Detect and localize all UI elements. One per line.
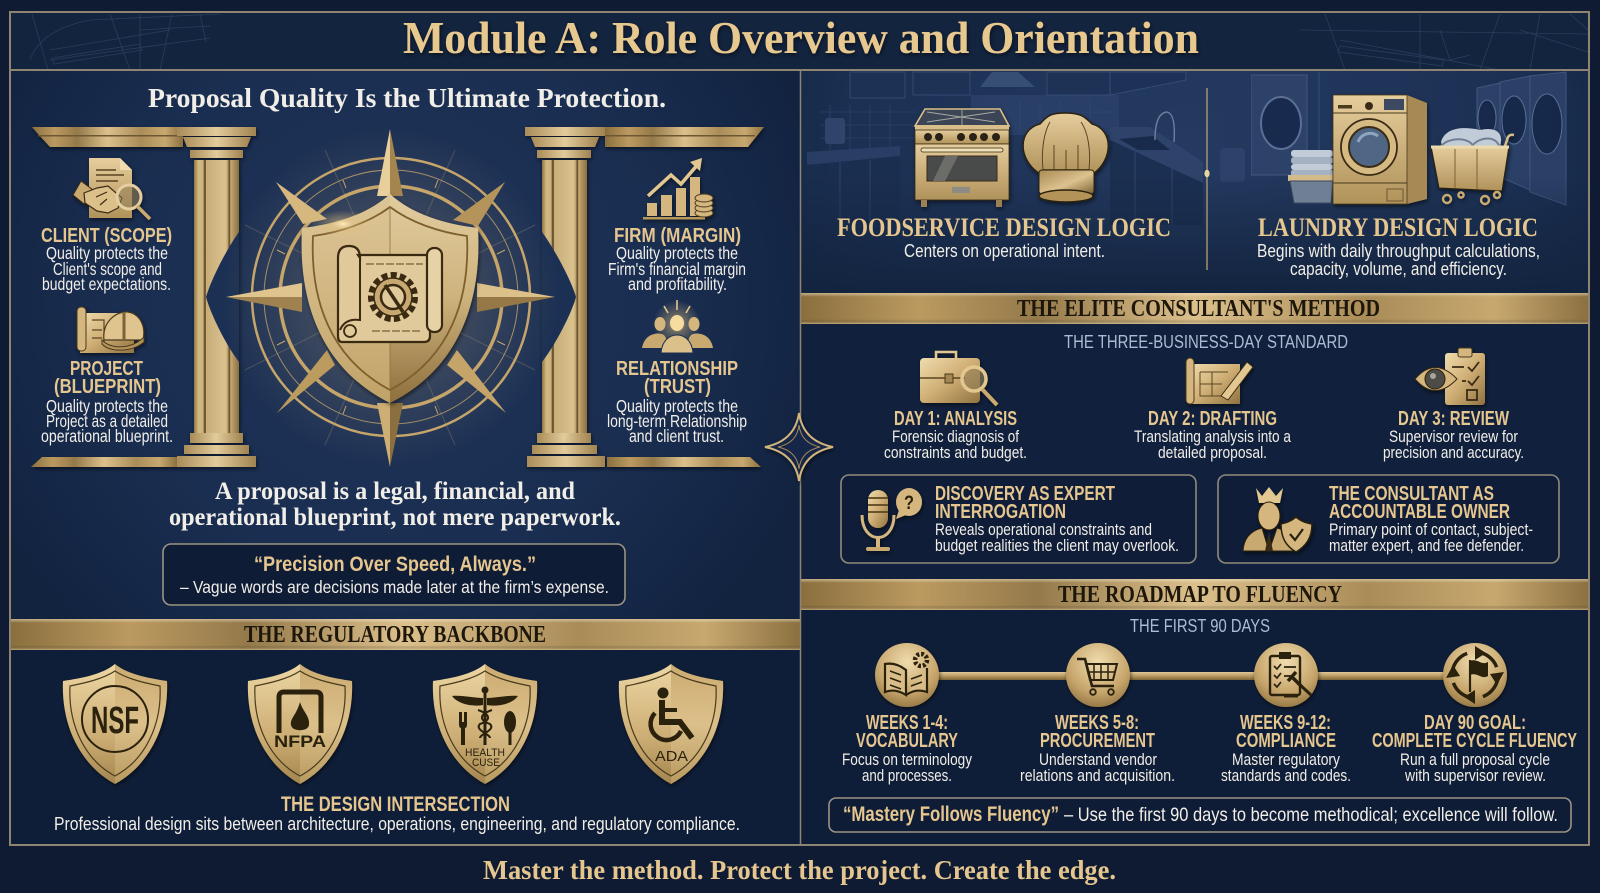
- card text: INTERROGATION: [935, 501, 1066, 523]
- card text: THE CONSULTANT AS: [1329, 483, 1494, 505]
- text: [1236, 712, 1336, 752]
- band: elite consultant's method: THE ELITE CONSULTANT'S METHOD: [1017, 296, 1380, 322]
- heading: RELATIONSHIP: [616, 358, 738, 380]
- description: Client's scope and: [53, 259, 162, 279]
- badge: health code: HEALTH: [465, 747, 505, 759]
- callout: mastery follows fluency: [829, 798, 1571, 832]
- compass spikes: [226, 129, 555, 467]
- heading: [616, 358, 738, 398]
- icon: people with glow: [642, 300, 713, 353]
- panel: regulatory backbone: [11, 619, 800, 845]
- text: DAY 90 GOAL:: [1424, 712, 1526, 734]
- badge: NSF: [63, 664, 167, 784]
- text: [856, 712, 958, 752]
- statement: proposal is a blueprint: operational blueprint, not mere paperwork.: [169, 502, 621, 531]
- callout: mastery follows fluency: “Mastery Follows Fluency”: [843, 803, 1059, 826]
- icon: crowned consultant with shield: [1243, 487, 1312, 552]
- description: budget expectations.: [42, 274, 171, 294]
- panel: proposal quality: [11, 71, 800, 619]
- description: operational blueprint.: [41, 426, 173, 446]
- step: day 1: constraints and budget.: [884, 443, 1027, 462]
- milestone: weeks 9-12: Master regulatory: [1232, 750, 1340, 769]
- blueprint scroll and gear: [338, 246, 442, 342]
- milestone: weeks 5-8: Understand vendor: [1039, 750, 1157, 769]
- text: WEEKS 1-4:: [866, 712, 948, 734]
- text: [1040, 712, 1155, 752]
- milestone: day 90 goal: Run a full proposal cycle: [1400, 750, 1550, 769]
- heading: laundry design logic: LAUNDRY DESIGN LOGIC: [1258, 213, 1538, 242]
- panel: header: [11, 12, 1589, 70]
- heading: FIRM (MARGIN): [614, 225, 741, 247]
- icon: cycle arrows and flag: [1443, 643, 1507, 707]
- callout: precision over speed: “Precision Over Speed, Always.”: [254, 553, 536, 576]
- left pillar: [31, 127, 256, 467]
- subheading: the first 90 days: THE FIRST 90 DAYS: [1130, 615, 1270, 636]
- heading: CLIENT (SCOPE): [41, 225, 172, 247]
- block: client scope: [41, 158, 172, 294]
- card text: ACCOUNTABLE OWNER: [1329, 501, 1510, 523]
- panel: the roadmap to fluency: [801, 579, 1589, 845]
- icon: range oven: [915, 109, 1009, 207]
- block: project blueprint: [41, 307, 173, 446]
- milestone: weeks 5-8: [1020, 643, 1175, 785]
- description: [608, 243, 746, 294]
- milestone: weeks 1-4: and processes.: [862, 766, 952, 785]
- title: Module A: Role Overview and Orientation: [403, 12, 1199, 63]
- card: the consultant as accountable owner: [1218, 475, 1559, 563]
- card: discovery as expert interrogation: Reveals operational constraints and: [935, 520, 1152, 539]
- description: and profitability.: [628, 274, 727, 294]
- description: and client trust.: [629, 426, 724, 446]
- statement: proposal is a blueprint: [169, 476, 621, 531]
- card text: [935, 483, 1115, 523]
- band: roadmap to fluency: THE ROADMAP TO FLUENCY: [1058, 582, 1342, 608]
- text: the design intersection: THE DESIGN INTERSECTION: [281, 793, 510, 816]
- description: [41, 396, 173, 446]
- card: discovery as expert interrogation: budget realities the client may overlook.: [935, 536, 1179, 555]
- milestone: weeks 9-12: standards and codes.: [1221, 766, 1351, 785]
- icon: clipboard and gavel: [1254, 643, 1318, 707]
- icon: laundry cart: [1431, 128, 1514, 204]
- blueprint line art right: [1300, 14, 1588, 70]
- description: Quality protects the: [46, 396, 168, 416]
- icon: washing machine: [1333, 95, 1427, 204]
- heading: [54, 358, 161, 398]
- milestone: weeks 1-4: [842, 643, 972, 785]
- icon: shopping cart: [1066, 643, 1130, 707]
- callout: precision over speed: – Vague words are decisions made later at the firm’s expense.: [180, 577, 609, 597]
- description: Firm's financial margin: [608, 259, 746, 279]
- statement: proposal is a blueprint: A proposal is a legal, financial, and: [215, 476, 575, 505]
- milestone: weeks 5-8: relations and acquisition.: [1020, 766, 1175, 785]
- text: PROCUREMENT: [1040, 730, 1155, 752]
- icon: eye and checklist: [1415, 348, 1485, 405]
- panel: the elite consultant's method: [801, 293, 1589, 579]
- step: day 2: [1134, 358, 1291, 462]
- description: Quality protects the: [616, 396, 738, 416]
- icon: client handshake: [73, 158, 150, 219]
- text: WEEKS 9-12:: [1240, 712, 1331, 734]
- heading: laundry design logic: capacity, volume, and efficiency.: [1290, 258, 1507, 279]
- badge: ADA: [619, 664, 723, 784]
- description: long-term Relationship: [607, 411, 747, 431]
- milestone: weeks 1-4: Focus on terminology: [842, 750, 972, 769]
- card text: DISCOVERY AS EXPERT: [935, 483, 1115, 505]
- card: discovery as expert interrogation: [841, 475, 1196, 563]
- step: day 1: Forensic diagnosis of: [892, 427, 1019, 446]
- description: Quality protects the: [616, 243, 738, 263]
- badge: NFPA: NFPA: [274, 732, 326, 751]
- band: the regulatory backbone: [11, 619, 800, 650]
- icon: microphone and question: ?: [904, 493, 914, 514]
- heading: laundry design logic: [1257, 213, 1540, 279]
- text: DAY 3: REVIEW: [1398, 408, 1509, 430]
- band: elite consultant's method: [801, 293, 1589, 324]
- step: day 2: Translating analysis into a: [1134, 427, 1291, 446]
- callout: precision over speed: [163, 544, 625, 605]
- icon: blueprint and pencil: [1186, 358, 1253, 404]
- icon: briefcase and magnifier: [920, 352, 997, 405]
- text: VOCABULARY: [856, 730, 958, 752]
- description: Quality protects the: [46, 243, 168, 263]
- icon: towel basket: [1288, 150, 1333, 203]
- laundry background scene: [1220, 72, 1566, 205]
- badge: NSF: NSF: [91, 700, 139, 742]
- milestone: day 90 goal: with supervisor review.: [1404, 766, 1546, 785]
- dark lens cut into pillars: [206, 232, 239, 362]
- panel: design logic: [801, 71, 1589, 293]
- heading: foodservice design logic: FOODSERVICE DESIGN LOGIC: [837, 213, 1171, 242]
- icon: chef hat: [1023, 113, 1108, 202]
- description: [42, 243, 171, 294]
- central shield emblem: [206, 127, 576, 467]
- heading: foodservice design logic: [837, 213, 1171, 261]
- kitchen background scene: [807, 72, 1203, 225]
- block: relationship trust: [607, 300, 747, 446]
- milestone: day 90 goal: [1372, 643, 1577, 785]
- badge: NFPA: [248, 664, 352, 784]
- badge: ADA: ADA: [655, 748, 688, 765]
- step: day 2: detailed proposal.: [1158, 443, 1267, 462]
- icon: open book and gear: [875, 643, 939, 707]
- icon: blueprint and hard hat: [77, 307, 144, 353]
- shield highlight: [311, 210, 375, 238]
- text: [1372, 712, 1577, 752]
- timeline connector: [907, 672, 1475, 680]
- text: DAY 1: ANALYSIS: [894, 408, 1017, 430]
- description: Project as a detailed: [46, 411, 168, 431]
- card text: [1329, 483, 1510, 523]
- right pillar: [525, 127, 764, 467]
- text: WEEKS 5-8:: [1055, 712, 1139, 734]
- icon: growth chart and coins: [643, 158, 713, 220]
- heading: proposal quality: Proposal Quality Is the Ultimate Protection.: [148, 83, 666, 113]
- badge: health code: CUSE: [472, 757, 500, 769]
- step: day 3: precision and accuracy.: [1383, 443, 1524, 462]
- heading: laundry design logic: Begins with daily throughput calculations,: [1257, 240, 1540, 261]
- milestone: weeks 9-12: [1221, 643, 1351, 785]
- block: firm margin: [608, 158, 746, 294]
- step: day 1: [884, 352, 1027, 462]
- badge: health code: [433, 664, 537, 784]
- text: the design intersection: Professional design sits between architecture, operations, engineering, and regulatory compliance.: [54, 814, 740, 834]
- band: the regulatory backbone: THE REGULATORY BACKBONE: [244, 622, 546, 648]
- heading: (BLUEPRINT): [54, 376, 161, 398]
- text: COMPLIANCE: [1236, 730, 1336, 752]
- description: [607, 396, 747, 446]
- center compass star: [765, 413, 833, 481]
- footer tagline: Master the method. Protect the project. Create the edge.: [483, 855, 1116, 885]
- shield body: [302, 194, 478, 403]
- icon: microphone and question: [862, 488, 922, 551]
- text: DAY 2: DRAFTING: [1148, 408, 1277, 430]
- card: the consultant as accountable owner: matter expert, and fee defender.: [1329, 536, 1524, 555]
- step: day 3: Supervisor review for: [1389, 427, 1518, 446]
- heading: PROJECT: [70, 358, 143, 380]
- card: the consultant as accountable owner: Primary point of contact, subject-: [1329, 520, 1533, 539]
- heading: foodservice design logic: Centers on operational intent.: [904, 240, 1105, 261]
- heading: (TRUST): [644, 376, 711, 398]
- subheading: three business day standard: THE THREE-BUSINESS-DAY STANDARD: [1064, 331, 1348, 352]
- blueprint line art left: [30, 14, 220, 70]
- step: day 3: [1383, 348, 1524, 462]
- text: the design intersection: [54, 793, 740, 834]
- divider between design logics: [1206, 88, 1208, 270]
- band: roadmap to fluency: [801, 579, 1589, 610]
